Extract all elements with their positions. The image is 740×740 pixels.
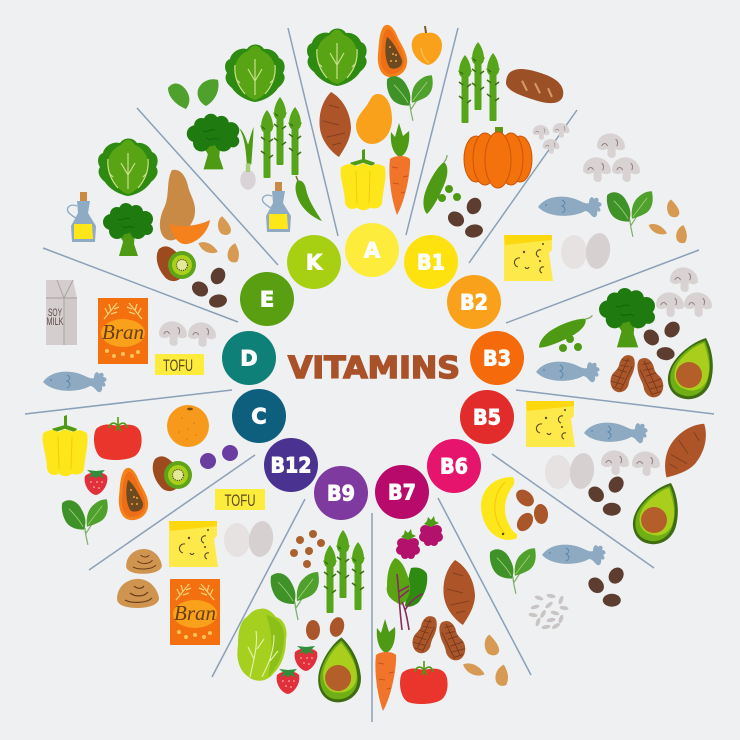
vitamin E: E: [260, 288, 274, 312]
tofu label: TOFU: [163, 356, 193, 375]
vitamin B3: B3: [483, 346, 511, 370]
vitamin B5: [460, 390, 514, 444]
vitamin B6: [427, 439, 481, 493]
panel: vitamin B2 foods: [504, 133, 687, 281]
vitamin K: [287, 235, 341, 289]
tofu label: [215, 489, 265, 510]
panel: vitamin B1 foods: [423, 42, 569, 239]
tofu label: TOFU: [224, 491, 256, 510]
panel: vitamin B9 foods: [237, 530, 369, 708]
vitamin B2: B2: [460, 290, 488, 314]
vitamin B1: [404, 235, 458, 289]
panel: vitamin B6 foods: [481, 477, 628, 630]
panel: vitamin B3 foods: [536, 267, 713, 399]
vitamin D: D: [240, 346, 258, 370]
bran box: Bran: [174, 601, 216, 625]
vitamin B7: B7: [388, 480, 416, 504]
vitamin B7: [375, 465, 429, 519]
kidney beans: [306, 616, 346, 640]
bran box: Bran: [102, 320, 144, 344]
vitamin K: K: [306, 250, 323, 274]
small leaves: [168, 79, 218, 109]
panel: vitamin E foods: [67, 138, 239, 309]
panel: vitamin B12 foods: [117, 489, 275, 645]
vitamin B2: [447, 275, 501, 329]
panel: vitamin A foods: [307, 25, 442, 215]
panel: vitamin C foods: [43, 405, 238, 545]
vitamin B5: B5: [473, 406, 501, 430]
vitamin A: A: [364, 238, 381, 262]
soy milk carton: SOY: [48, 307, 62, 319]
vitamin A: [345, 223, 399, 277]
title: VITAMINS: [288, 351, 460, 386]
vitamin B9: B9: [327, 482, 355, 506]
panel: vitamin D foods: [43, 280, 216, 392]
vitamin C: [232, 389, 286, 443]
bran box: [98, 298, 148, 364]
vitamin ring: [222, 223, 524, 520]
butternut squash: [160, 170, 210, 244]
panel: vitamin B5 foods: [526, 401, 719, 544]
panel: vitamin B7 foods: [375, 516, 508, 711]
vitamin B3: [470, 331, 524, 385]
vitamin C: C: [251, 404, 267, 428]
vitamin B1: B1: [417, 250, 445, 274]
vitamin D: [222, 331, 276, 385]
soy milk carton: MILK: [46, 316, 64, 328]
vitamin B12: [264, 438, 318, 492]
bran box: [170, 579, 220, 645]
vitamin E: [240, 272, 294, 326]
soy milk carton: [46, 280, 77, 345]
vitamin B9: [314, 466, 368, 520]
panel: vitamin K foods: [168, 44, 322, 232]
tofu label: [155, 354, 204, 375]
vitamin B6: B6: [440, 454, 468, 478]
vitamin B12: B12: [270, 454, 312, 478]
